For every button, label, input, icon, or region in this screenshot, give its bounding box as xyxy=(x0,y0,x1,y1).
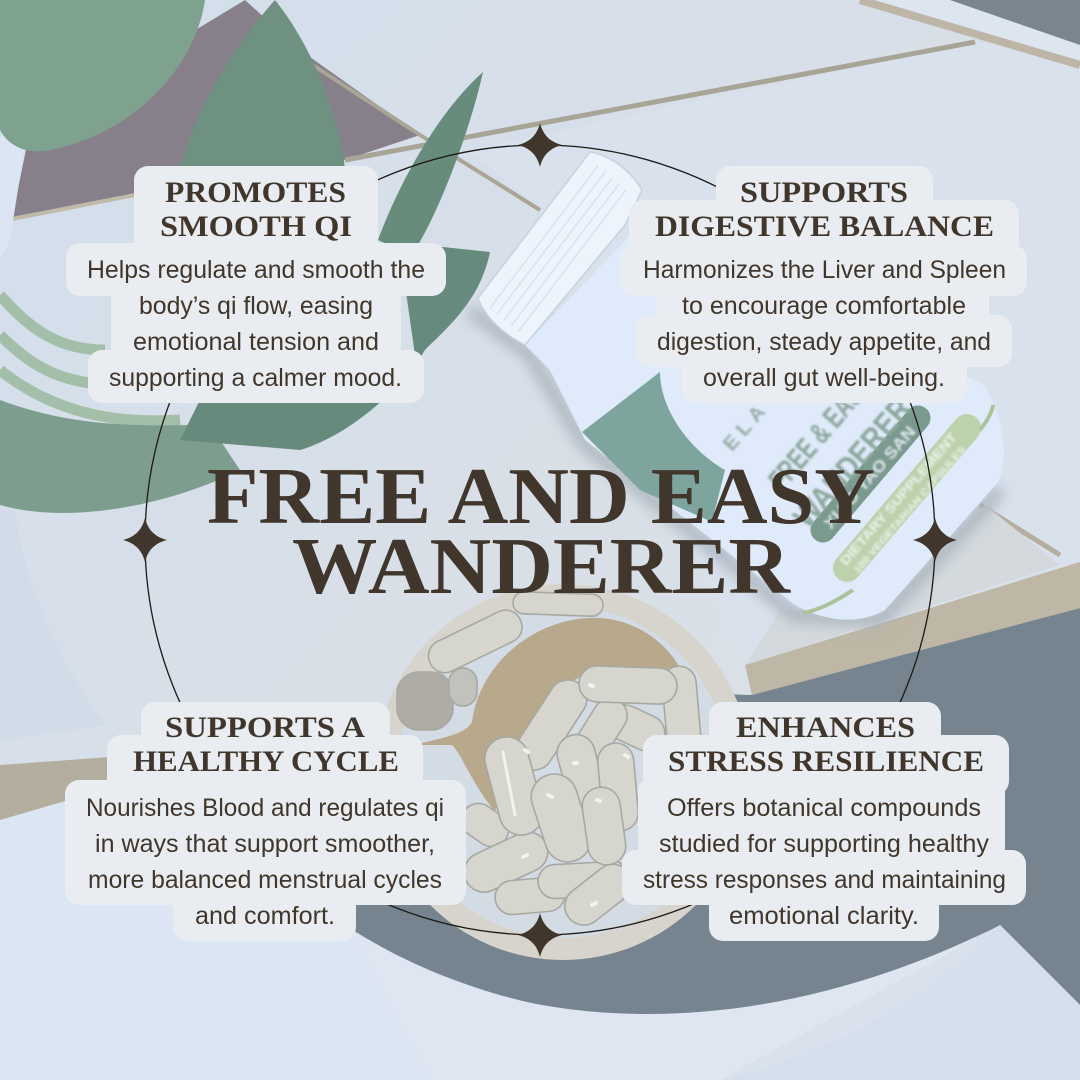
heading: SUPPORTS A xyxy=(165,711,365,744)
sparkle: right xyxy=(913,518,957,562)
bowl inside xyxy=(397,606,729,938)
tile: purple stone xyxy=(12,0,420,218)
tile: dark corner xyxy=(950,0,1080,45)
title xyxy=(207,453,875,611)
bowl of capsules xyxy=(375,584,751,960)
body text: emotional tension and xyxy=(133,328,379,356)
body text: in ways that support smoother, xyxy=(95,830,435,858)
leaf: top centre xyxy=(175,0,345,200)
heading xyxy=(655,176,994,243)
body text: to encourage comfortable xyxy=(682,292,966,320)
bottle text: WANDERER xyxy=(786,390,918,535)
body text: emotional clarity. xyxy=(729,902,919,930)
panel: supports a healthy cycle xyxy=(65,702,466,941)
sparkle: bottom xyxy=(518,913,562,957)
gold strips xyxy=(745,562,1080,695)
capsules behind spoon xyxy=(397,591,603,730)
panel: promotes smooth qi xyxy=(66,166,446,403)
sparkle: left xyxy=(123,518,167,562)
heading: DIGESTIVE BALANCE xyxy=(655,210,994,243)
body text: Harmonizes the Liver and Spleen xyxy=(643,256,1006,284)
panel: enhances stress resilience xyxy=(622,702,1026,941)
leaf: lower left xyxy=(0,400,240,513)
bottle text: 100 VEGETARIAN CAPSULES xyxy=(852,444,969,576)
floor xyxy=(0,785,720,1080)
bottle cap xyxy=(478,152,642,345)
bottle text: ELA xyxy=(719,397,774,455)
heading xyxy=(133,711,399,778)
body text: Offers botanical compounds xyxy=(667,794,981,822)
leaf: stalks xyxy=(0,295,180,421)
body text: supporting a calmer mood. xyxy=(109,364,402,392)
heading: ENHANCES xyxy=(736,711,915,744)
heading: HEALTHY CYCLE xyxy=(133,745,399,778)
body text: Nourishes Blood and regulates qi xyxy=(86,794,444,822)
heading xyxy=(668,711,984,778)
leaf: top left xyxy=(0,0,205,151)
sparkle: top xyxy=(518,123,562,167)
bottle text: FREE & EASY xyxy=(762,369,879,497)
bottle text: DIETARY SUPPLEMENT xyxy=(837,430,960,568)
heading: SUPPORTS xyxy=(740,176,908,209)
bottle text: XIAO YAO SAN xyxy=(821,423,919,533)
body text xyxy=(87,256,425,392)
body text: overall gut well-being. xyxy=(703,364,945,392)
capsule highlights xyxy=(503,685,628,905)
body text: Helps regulate and smooth the xyxy=(87,256,425,284)
bottle body xyxy=(525,225,1004,620)
body text xyxy=(643,794,1006,930)
title: FREE AND EASY xyxy=(207,453,875,541)
bottle pill label xyxy=(823,418,918,530)
bowl rim xyxy=(375,584,751,960)
cap ribs xyxy=(490,166,626,332)
heading xyxy=(160,176,352,243)
heading: PROMOTES xyxy=(165,176,346,209)
body text: body’s qi flow, easing xyxy=(139,292,373,320)
capsules in front xyxy=(455,665,703,933)
bottle text xyxy=(719,369,969,576)
bottle green band xyxy=(847,428,967,568)
bottle teal wrap xyxy=(582,372,725,522)
body text xyxy=(643,256,1006,392)
body text: studied for supporting healthy xyxy=(659,830,989,858)
spoon xyxy=(415,618,688,812)
disc edge xyxy=(0,135,25,260)
panel: supports digestive balance xyxy=(621,166,1027,403)
body text: stress responses and maintaining xyxy=(643,866,1006,894)
grey stone under bottle xyxy=(745,505,1060,665)
tile: light bottom right xyxy=(720,925,1080,1080)
leaves xyxy=(0,0,490,513)
body text: digestion, steady appetite, and xyxy=(657,328,991,356)
dark slate area xyxy=(345,608,1080,1020)
bottle xyxy=(470,152,1004,620)
body text: more balanced menstrual cycles xyxy=(88,866,442,894)
heading: STRESS RESILIENCE xyxy=(668,745,984,778)
body text xyxy=(86,794,444,930)
leaf: dark centre xyxy=(180,240,490,450)
leaf: narrow blade xyxy=(378,72,483,250)
bottle shadow xyxy=(470,310,1000,620)
heading: SMOOTH QI xyxy=(160,210,352,243)
title: WANDERER xyxy=(292,523,791,611)
circle ring with four sparkles xyxy=(123,123,957,957)
body text: and comfort. xyxy=(195,902,335,930)
